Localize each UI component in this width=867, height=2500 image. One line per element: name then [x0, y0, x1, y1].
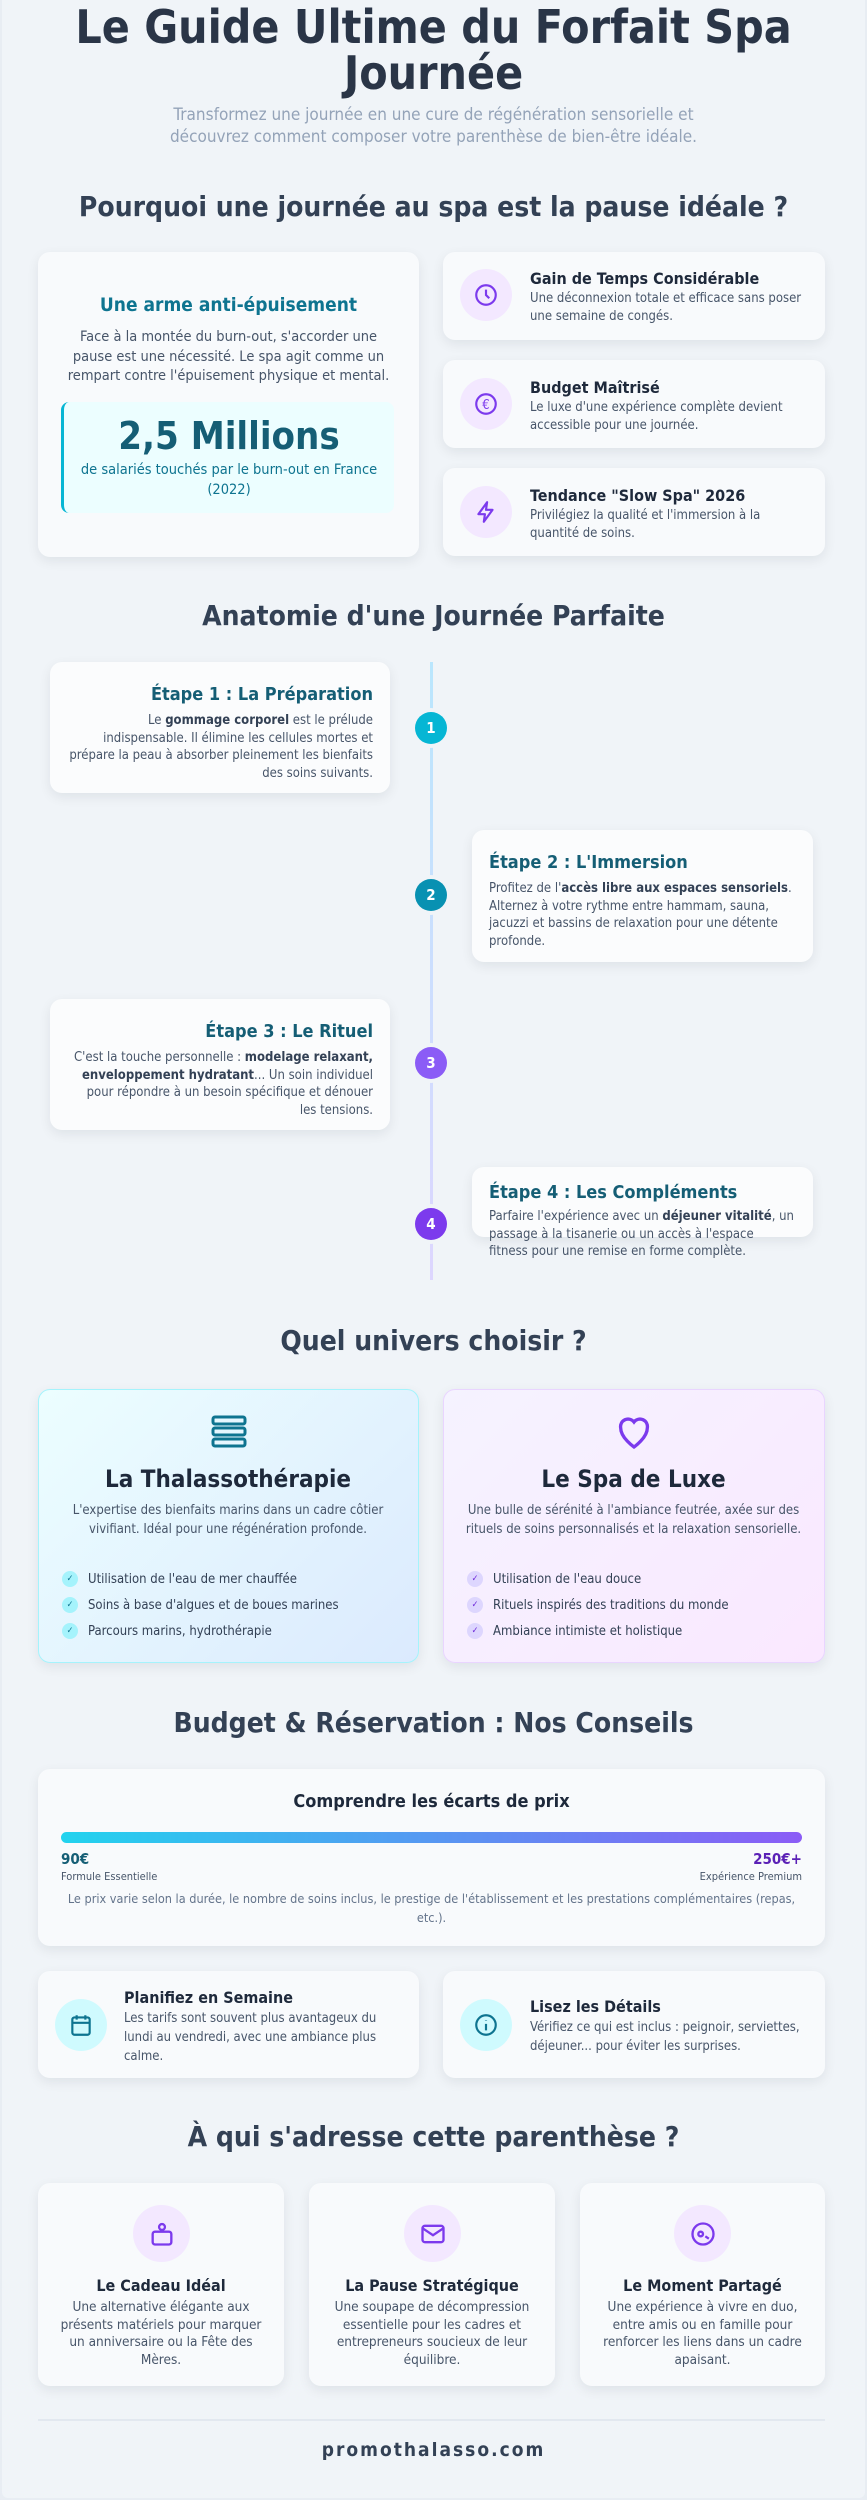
list: ✓ [67, 1574, 73, 1584]
step 3 marker [415, 1047, 447, 1079]
step 4 card: Étape 4 : Les Compléments [489, 1182, 737, 1203]
title [75, 0, 792, 100]
list: ✓ [472, 1600, 478, 1610]
heading: à qui: À qui s'adresse cette parenthèse ? [188, 2120, 679, 2153]
step 4 marker: 4 [426, 1215, 436, 1233]
stat box: (2022) [207, 482, 251, 498]
panel: thalasso [38, 1389, 419, 1663]
card: partagé: Une expérience à vivre en duo, entre amis ou en famille pour renforcer les liens dans un cadre apaisant. [603, 2299, 802, 2368]
panel: spa luxe: Une bulle de sérénité à l'ambiance feutrée, axée sur des rituels de soins personnalisés et la relaxation sensorielle. [466, 1503, 801, 1536]
card: slow spa: Privilégiez la qualité et l'immersion à la quantité de soins. [530, 508, 760, 541]
panel: thalasso: La Thalassothérapie [105, 1465, 351, 1493]
icon: euro [460, 378, 512, 430]
card: gain de temps [443, 252, 825, 340]
step 4 card: Parfaire l'expérience avec un déjeuner vitalité, un passage à la tisanerie ou un accès à l'espace fitness pour une remise en forme complète. [489, 1209, 794, 1259]
stat box: 2,5 Millions [118, 414, 340, 458]
stat box: de salariés touchés par le burn-out en France [81, 462, 377, 478]
title: Le Guide Ultime du Forfait Spa [75, 0, 792, 54]
subtitle [170, 105, 697, 147]
gradient bar [61, 1832, 802, 1843]
panel: price range [38, 1769, 825, 1946]
icon: envelope [404, 2205, 461, 2262]
card: cadeau: Une alternative élégante aux présents matériels pour marquer un anniversaire ou la Fête des Mères. [61, 2299, 261, 2368]
card: cadeau: Le Cadeau Idéal [96, 2276, 226, 2295]
icon: smile [674, 2205, 731, 2262]
card: détails: Vérifiez ce qui est inclus : peignoir, serviettes, déjeuner... pour éviter les surprises. [530, 2020, 800, 2054]
card: semaine: Planifiez en Semaine [124, 1988, 293, 2007]
card: gain de temps: Une déconnexion totale et efficace sans poser une semaine de congés. [530, 291, 801, 324]
step 1 card [50, 662, 390, 793]
icon: info [460, 1999, 512, 2051]
step 2 card: Profitez de l'accès libre aux espaces sensoriels. Alternez à votre rythme entre hammam, sauna, jacuzzi et bassins de relaxation pour une détente profonde. [489, 881, 792, 948]
step 4 marker [415, 1208, 447, 1240]
heading: anatomie: Anatomie d'une Journée Parfaite [202, 599, 665, 632]
heading: pourquoi: Pourquoi une journée au spa est la pause idéale ? [79, 190, 788, 223]
list: Utilisation de l'eau douce [493, 1572, 641, 1586]
list: Rituels inspirés des traditions du monde [493, 1598, 729, 1612]
icon: clock [460, 269, 512, 321]
list [62, 1571, 339, 1639]
card: cadeau [38, 2183, 284, 2386]
step 1 card: Le gommage corporel est le prélude indispensable. Il élimine les cellules mortes et prépare la peau à absorber pleinement les bienfaits des soins suivants. [69, 713, 373, 780]
timeline line [430, 662, 433, 1280]
footer: promothalasso.com [322, 2439, 545, 2461]
card: semaine [38, 1971, 419, 2078]
icon: gift [133, 2205, 190, 2262]
card: budget: Le luxe d'une expérience complète devient accessible pour une journée. [530, 400, 783, 433]
card: partagé: Le Moment Partagé [623, 2276, 782, 2295]
icon: bolt [460, 486, 512, 538]
step 2 card [472, 830, 813, 962]
step 3 marker: 3 [426, 1054, 436, 1072]
list [467, 1571, 729, 1639]
list: Soins à base d'algues et de boues marines [88, 1598, 339, 1612]
list: ✓ [472, 1574, 478, 1584]
icon: heart [618, 1417, 650, 1449]
card: slow spa [443, 468, 825, 556]
panel: price range: Formule Essentielle [61, 1870, 157, 1883]
list: Parcours marins, hydrothérapie [88, 1624, 272, 1638]
subtitle: découvrez comment composer votre parenthèse de bien-être idéale. [170, 127, 697, 147]
list: Ambiance intimiste et holistique [493, 1624, 682, 1638]
card: semaine: Les tarifs sont souvent plus avantageux du lundi au vendredi, avec une ambiance plus calme. [124, 2011, 376, 2064]
card: gain de temps: Gain de Temps Considérable [530, 269, 759, 288]
panel: anti-épuisement [38, 252, 419, 557]
step 1 card: Étape 1 : La Préparation [151, 684, 373, 705]
panel: price range: Expérience Premium [700, 1870, 802, 1883]
heading: univers: Quel univers choisir ? [280, 1324, 587, 1357]
icon: euro: € [482, 398, 490, 413]
step 2 marker: 2 [426, 886, 436, 904]
title: Journée [344, 46, 523, 100]
stat box [61, 402, 394, 513]
step 3 card: Étape 3 : Le Rituel [205, 1021, 373, 1042]
panel title: Une arme anti-épuisement [100, 294, 357, 316]
icon: calendar [55, 1999, 107, 2051]
panel: spa luxe: Le Spa de Luxe [541, 1465, 726, 1493]
panel: price range: Le prix varie selon la durée, le nombre de soins inclus, le prestige de l'établissement et les prestations complémentaires (repas, etc.). [68, 1891, 795, 1925]
panel text: Face à la montée du burn-out, s'accorder une pause est une nécessité. Le spa agit comme un rempart contre l'épuisement physique et mental. [68, 329, 389, 384]
subtitle: Transformez une journée en une cure de régénération sensorielle et [173, 105, 694, 125]
card: détails: Lisez les Détails [530, 1997, 661, 2016]
panel: spa luxe [443, 1389, 825, 1663]
list: ✓ [67, 1600, 73, 1610]
heading: budget: Budget & Réservation : Nos Conseils [174, 1706, 694, 1739]
step 4 card [472, 1167, 813, 1237]
step 1 marker [415, 712, 447, 744]
card: pause [309, 2183, 555, 2386]
step 2 marker [415, 879, 447, 911]
card: budget [443, 360, 825, 448]
list: Utilisation de l'eau de mer chauffée [88, 1572, 297, 1586]
step 3 card [50, 999, 390, 1130]
card: pause: Une soupape de décompression essentielle pour les cadres et entrepreneurs soucieux de leur équilibre. [335, 2299, 529, 2368]
panel: price range: 250€+ [753, 1850, 802, 1868]
list: ✓ [67, 1626, 73, 1636]
icon: layers [212, 1416, 246, 1448]
panel: thalasso: L'expertise des bienfaits marins dans un cadre côtier vivifiant. Idéal pour une régénération profonde. [73, 1503, 383, 1536]
step 3 card: C'est la touche personnelle : modelage relaxant, enveloppement hydratant... Un soin individuel pour répondre à un besoin spécifique et dénouer les tensions. [74, 1050, 373, 1118]
step 2 card: Étape 2 : L'Immersion [489, 852, 688, 873]
card: pause: La Pause Stratégique [345, 2276, 519, 2295]
card: partagé [580, 2183, 825, 2386]
panel: price range: 90€ [61, 1850, 89, 1868]
card: budget: Budget Maîtrisé [530, 378, 660, 397]
step 1 marker: 1 [426, 719, 436, 737]
list: ✓ [472, 1626, 478, 1636]
card: slow spa: Tendance "Slow Spa" 2026 [530, 486, 745, 505]
card: détails [443, 1971, 825, 2078]
panel: price range: Comprendre les écarts de prix [293, 1791, 570, 1812]
